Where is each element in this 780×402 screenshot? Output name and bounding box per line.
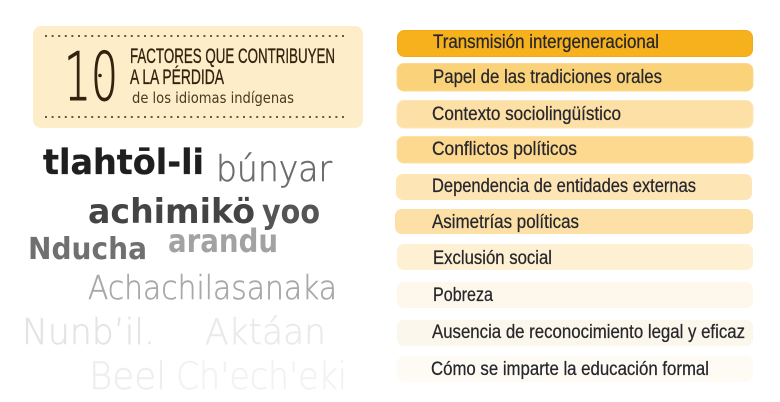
word: búnyar: búnyar (216, 149, 332, 190)
word: Achachilasanaka: Achachilasanaka (88, 268, 337, 307)
factor 7 (397, 244, 753, 270)
panel: header (33, 26, 363, 128)
word cloud (22, 143, 347, 398)
factor 7: Exclusión social (433, 248, 552, 269)
word: Nducha: Nducha (28, 232, 147, 267)
factor 8 (397, 282, 753, 308)
factor 2: Papel de las tradiciones orales (433, 67, 662, 88)
factor 9: Ausencia de reconocimiento legal y eficaz (432, 322, 745, 343)
factor 4: Conflictos políticos (432, 139, 577, 160)
factor 2 (397, 64, 753, 91)
factor 6: Asimetrías políticas (432, 212, 579, 233)
factor 9 (397, 320, 753, 346)
word: Nunb'il.: Nunb’il. (22, 312, 155, 353)
word: Aktáan: Aktáan (205, 312, 326, 353)
word: yoo: yoo (262, 192, 320, 231)
factor 6 (395, 209, 753, 234)
word: tlahtōl-li: tlahtōl-li (43, 143, 204, 183)
factor 1: Transmisión intergeneracional (433, 32, 659, 53)
number 10 (64, 38, 118, 116)
factor 3 (397, 100, 753, 128)
factor 5: Dependencia de entidades externas (432, 176, 696, 197)
word: Beel: Beel (89, 355, 166, 398)
factor 5 (396, 174, 752, 200)
factor 3: Contexto sociolingüístico (432, 104, 621, 125)
heading: FACTORES QUE CONTRIBUYEN (130, 45, 335, 68)
factor 1 (398, 30, 752, 56)
word: achimikö: achimikö (88, 192, 255, 232)
heading: de los idiomas indígenas (132, 89, 294, 107)
factor 4 (397, 136, 753, 163)
factor 10: Cómo se imparte la educación formal (431, 359, 709, 380)
list of factors (395, 30, 753, 382)
word: arandu: arandu (168, 222, 278, 260)
heading: A LA PÉRDIDA (130, 66, 224, 89)
heading (130, 45, 335, 107)
number 10: 10 (64, 38, 118, 116)
word: Ch'ech'eki: Ch'ech'eki (176, 355, 347, 398)
factor 8: Pobreza (433, 285, 493, 306)
